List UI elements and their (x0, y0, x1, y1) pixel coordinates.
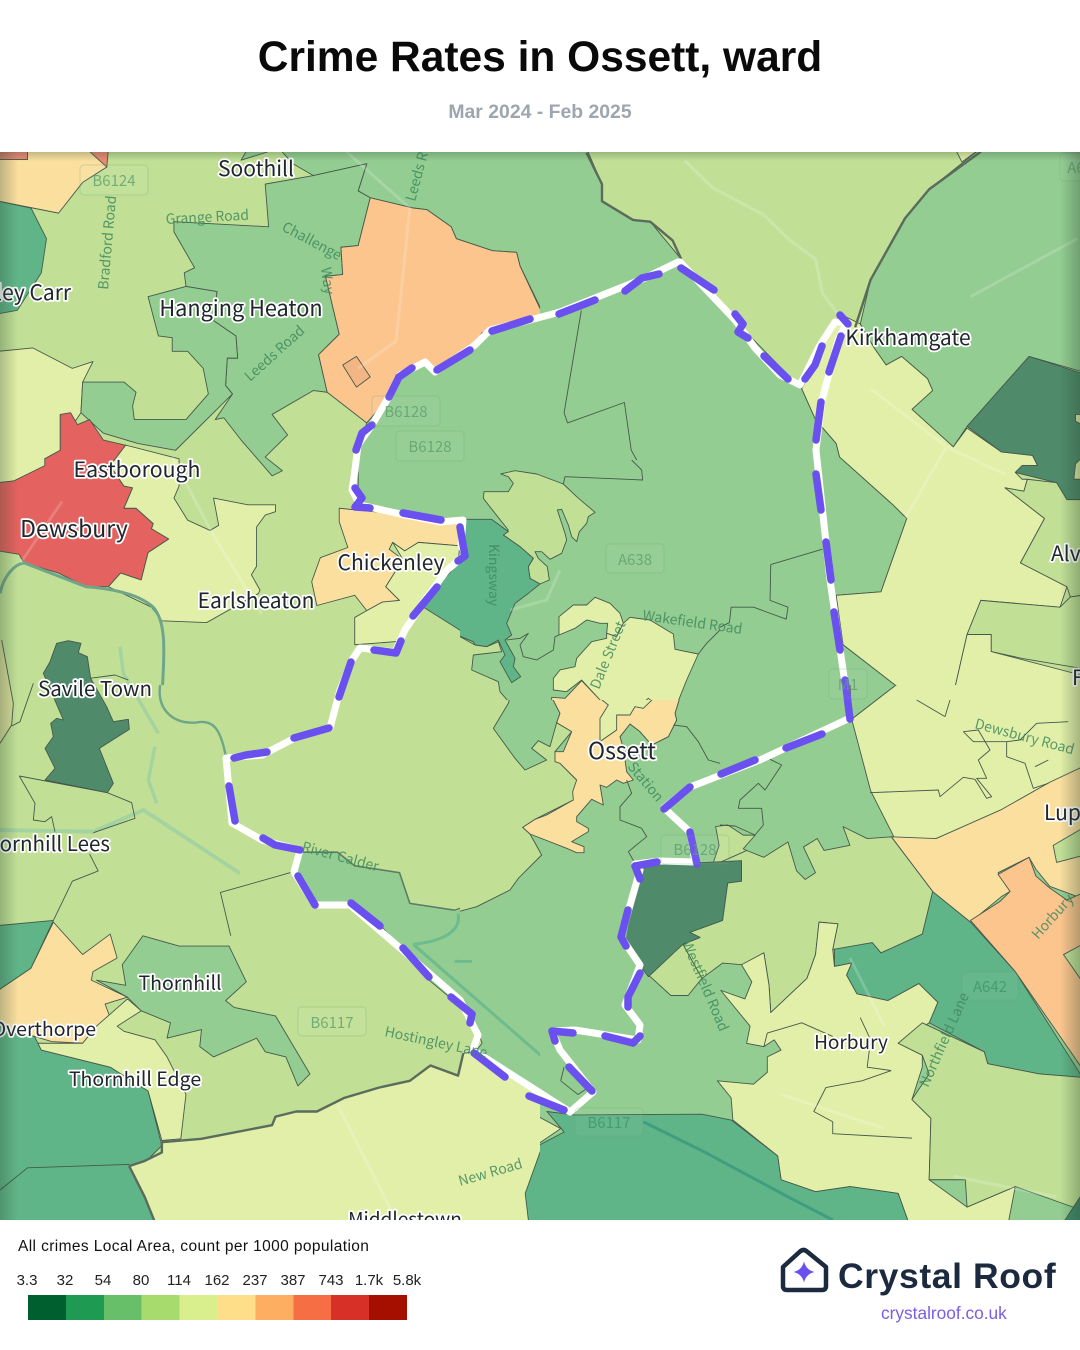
road name labels: Westfield Road (677, 937, 734, 1034)
legend (17, 1238, 422, 1320)
road name labels (93, 141, 1079, 1191)
road number shields: B6124 (92, 170, 136, 191)
legend tick labels: 162 (204, 1272, 230, 1289)
road number shields: B6128 (384, 401, 428, 422)
title: Crime Rates in Ossett, ward (258, 34, 822, 81)
legend colour scale (28, 1295, 407, 1320)
road name labels: Wakefield Road (641, 605, 744, 639)
wordmark: Crystal Roof (838, 1256, 1056, 1296)
place name labels: Savile Town (38, 672, 152, 702)
legend tick labels: 3.3 (17, 1272, 37, 1289)
place name labels: Earlsheaton (198, 585, 314, 615)
road number shields (80, 153, 1080, 1136)
road number shields: A638 (618, 549, 652, 570)
road number shields: B6117 (310, 1012, 354, 1033)
place name labels: Horbury (814, 1028, 888, 1055)
central detail: Kingsway, Dale Street neighbourhoods (457, 460, 720, 723)
road name labels: Leeds Road (240, 321, 309, 386)
road number shields: M1 (838, 674, 858, 695)
legend tick labels: 80 (133, 1272, 149, 1289)
place name labels: Hanging Heaton (159, 292, 323, 323)
map area: south-east quadrant (537, 682, 1080, 1228)
road name labels: Horbury (1027, 889, 1079, 943)
road name labels: Station (623, 757, 669, 806)
ward boundary: white line (226, 262, 850, 1112)
road name labels: River Calder (300, 837, 382, 876)
legend tick labels: 743 (318, 1272, 344, 1289)
map area: south-west quadrant (0, 682, 548, 1228)
map area: north-west quadrant (0, 147, 548, 696)
ward boundary: purple dashes (229, 268, 850, 1110)
road name labels: Kingsway (484, 544, 504, 607)
place name labels (0, 153, 1080, 1232)
legend tick labels: 32 (57, 1272, 73, 1289)
place name labels: Chickenley (338, 547, 445, 577)
place name labels: Ossett (588, 732, 656, 766)
legend tick labels: 1.7k (355, 1272, 383, 1289)
map area: north-east quadrant (537, 147, 1080, 693)
legend tick labels: 114 (167, 1272, 191, 1289)
place name labels: Kirkhamgate (845, 322, 971, 352)
Dewsbury Road neighbourhood outlines (720, 700, 1068, 835)
place name labels: Dewsbury (20, 510, 128, 544)
road name labels: Way (316, 266, 340, 296)
road number shields: A642 (973, 976, 1007, 997)
central detail: Ossett town centre (457, 697, 720, 960)
road name labels: Bradford Road (93, 195, 121, 290)
road number shields: B6117 (587, 1112, 631, 1133)
road name labels: Grange Road (165, 205, 249, 229)
legend tick labels: 5.8k (393, 1272, 421, 1289)
road name labels: Hostingley Lane (383, 1021, 490, 1063)
map edge shading (0, 152, 1080, 1220)
road name labels: New Road (456, 1153, 525, 1191)
legend tick labels (17, 1272, 422, 1289)
choropleth map (0, 152, 1080, 1220)
subtitle: date range: Mar 2024 - Feb 2025 (448, 101, 632, 123)
legend tick labels: 54 (95, 1272, 111, 1289)
legend tick labels: 237 (242, 1272, 268, 1289)
place name labels: Thornhill (138, 967, 222, 996)
place name labels: Soothill (218, 153, 294, 183)
legend tick labels: 387 (280, 1272, 306, 1289)
Savile Town dark area and river (0, 640, 240, 873)
icon: house with star (780, 1248, 828, 1292)
road name labels: Dale Street (585, 617, 631, 692)
road number shields: B6128 (673, 839, 717, 860)
place name labels: Eastborough (74, 453, 200, 484)
road name labels: Northfield Lane (914, 989, 974, 1090)
road number shields: B6128 (408, 436, 452, 457)
road name labels: Dewsbury Road (973, 714, 1077, 759)
place name labels: Thornhill Edge (69, 1063, 201, 1092)
logo: Crystal Roof (780, 1248, 1056, 1323)
road name labels: Challenge (279, 217, 346, 265)
website: crystalroof.co.uk (881, 1303, 1007, 1323)
legend title: All crimes Local Area, count per 1000 population (18, 1238, 369, 1255)
